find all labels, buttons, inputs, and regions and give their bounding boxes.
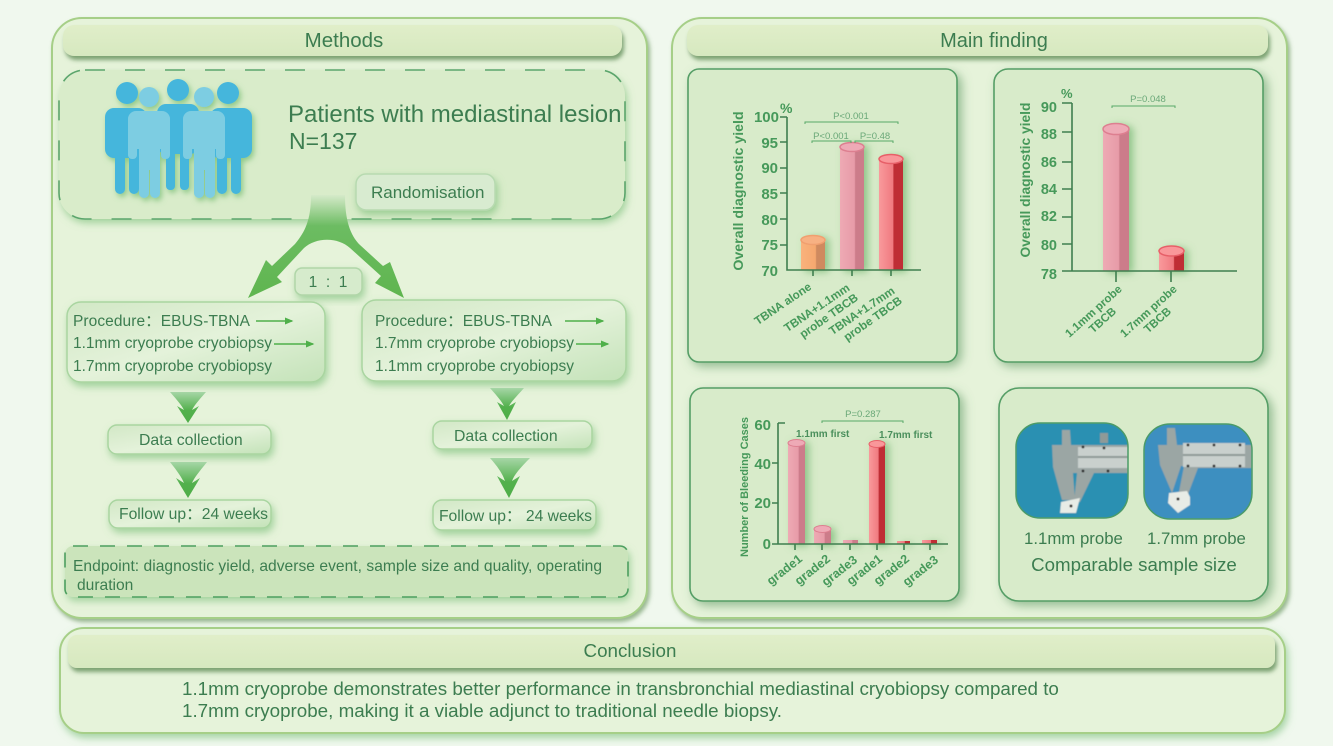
x labels: chart B: TBCB — [1087, 306, 1119, 336]
bars: chart C — [788, 440, 937, 544]
heading: main finding — [687, 25, 1268, 56]
y labels: chart B: 80 — [1041, 238, 1057, 254]
caption: probes: 1.7mm probe — [1147, 529, 1246, 548]
p values: chart A: P<0.001 — [833, 111, 869, 122]
p value: chart C: P=0.287 — [845, 409, 881, 420]
x labels: chart A: probe TBCB — [841, 294, 905, 344]
box: right data collection — [433, 421, 592, 449]
panel: chart B probe comparison — [994, 69, 1263, 362]
box: left procedure: 1.1mm cryoprobe cryobiopsy — [73, 335, 272, 352]
bars: chart B — [1103, 124, 1184, 271]
y labels: chart A: 100 — [754, 109, 779, 126]
box: left procedure: Procedure：EBUS-TBNA — [73, 313, 251, 330]
x labels: chart B: 1.1mm probe — [1063, 283, 1125, 340]
panel: chart C bleeding — [690, 388, 959, 601]
x labels: chart A: TBNA+1.1mm — [782, 281, 852, 335]
y labels: chart B: 90 — [1041, 100, 1057, 116]
text: conclusion: 1.1mm cryoprobe demonstrates better performance in transbronchial mediastinal cryobiopsy compared to — [182, 678, 1059, 699]
x labels: chart C: grade2 — [792, 552, 833, 588]
box: right procedure: Procedure：EBUS-TBNA — [375, 313, 553, 330]
box: endpoint: duration — [77, 577, 133, 594]
photo: 1.1mm probe caliper — [1016, 423, 1128, 518]
y labels: chart C: 0 — [763, 536, 771, 553]
y labels: chart A: 90 — [761, 160, 778, 177]
y labels: chart B: 82 — [1041, 209, 1057, 225]
box: left procedure — [67, 302, 325, 382]
box: ratio — [295, 268, 362, 295]
arrow: left to data collection — [170, 392, 206, 423]
y labels: chart A: 70 — [761, 263, 778, 280]
axes: chart B — [1062, 103, 1237, 282]
unit: chart B: % — [1061, 86, 1073, 101]
box: randomisation: Randomisation — [371, 183, 484, 202]
p value: chart B — [1112, 94, 1175, 108]
box: endpoint: Endpoint: diagnostic yield, adverse event, sample size and quality, operating — [73, 558, 602, 575]
p value: chart B: P=0.048 — [1130, 94, 1166, 105]
caption: comparable sample size: Comparable sample size — [1031, 554, 1237, 575]
y title: chart B: Overall diagnostic yield — [1018, 103, 1033, 257]
arrow: right to data collection — [490, 388, 524, 420]
box: left data collection: Data collection — [139, 432, 243, 449]
text: conclusion: 1.7mm cryoprobe, making it a viable adjunct to traditional needle biopsy. — [182, 700, 782, 721]
panel: conclusion — [60, 628, 1285, 733]
box: right data collection: Data collection — [454, 428, 558, 445]
box: left procedure: 1.7mm cryoprobe cryobiopsy — [73, 358, 272, 375]
box: right procedure: 1.7mm cryoprobe cryobiopsy — [375, 335, 574, 352]
arrow: right sequence 2 — [576, 343, 608, 345]
y labels: chart C: 20 — [754, 495, 771, 512]
box: left follow up — [109, 500, 271, 528]
y labels: chart A: 80 — [761, 212, 778, 229]
group labels: chart C: 1.7mm first — [879, 430, 933, 441]
y labels: chart A — [754, 109, 779, 280]
panel: main finding — [672, 18, 1287, 618]
p value: chart C — [822, 409, 903, 423]
x labels: chart A — [752, 280, 905, 344]
heading: methods: Methods — [305, 29, 383, 52]
y title: chart C: Number of Bleeding Cases — [739, 417, 751, 557]
text: patients — [288, 101, 622, 154]
box: right follow up: Follow up： 24 weeks — [439, 508, 592, 525]
heading: main finding: Main finding — [940, 30, 1048, 52]
box: ratio: 1 : 1 — [309, 274, 347, 291]
photo: 1.7mm probe caliper — [1144, 424, 1252, 519]
panel: sample size photos — [999, 388, 1268, 601]
icon: group of patients — [105, 79, 252, 198]
panel: chart A overall yield three arms — [688, 69, 957, 362]
box: left data collection — [108, 425, 271, 454]
x labels: chart C: grade1 — [764, 552, 805, 588]
x labels: chart C: grade3 — [900, 553, 941, 589]
axes: chart C — [772, 423, 948, 550]
box: randomisation — [356, 174, 495, 210]
x labels: chart C: grade3 — [819, 553, 860, 589]
caption: probes: 1.1mm probe — [1024, 529, 1123, 548]
arrow: left sequence 1 — [256, 320, 292, 322]
y labels: chart B — [1041, 100, 1057, 283]
x labels: chart C: grade2 — [871, 552, 912, 588]
text: patients: N=137 — [289, 128, 357, 154]
x labels: chart C — [764, 552, 941, 589]
y labels: chart A: 85 — [761, 186, 778, 203]
y labels: chart C: 60 — [754, 417, 771, 434]
unit: chart A: % — [780, 100, 793, 116]
group labels: chart C — [796, 429, 933, 441]
box: right procedure: 1.1mm cryoprobe cryobiopsy — [375, 358, 574, 375]
group labels: chart C: 1.1mm first — [796, 429, 850, 440]
box: right procedure — [362, 300, 626, 381]
x labels: chart B — [1063, 283, 1180, 340]
box: right follow up — [433, 500, 596, 530]
panel: methods — [52, 18, 647, 618]
y labels: chart B: 84 — [1041, 182, 1057, 198]
y labels: chart B: 88 — [1041, 127, 1057, 143]
x labels: chart C: grade1 — [844, 552, 885, 588]
y labels: chart A: 95 — [761, 135, 778, 152]
y labels: chart C: 40 — [754, 456, 771, 473]
axes: chart A — [780, 117, 921, 276]
heading: conclusion — [68, 635, 1275, 668]
y labels: chart B: 86 — [1041, 155, 1057, 171]
caption: probes — [1024, 529, 1246, 548]
x labels: chart A: probe TBCB — [797, 291, 861, 341]
text: conclusion — [182, 678, 1059, 721]
text: patients: Patients with mediastinal lesion — [288, 101, 622, 128]
x labels: chart A: TBNA alone — [752, 280, 814, 328]
y labels: chart C — [754, 417, 771, 553]
panel: patients — [59, 70, 625, 219]
arrow: left sequence 2 — [274, 343, 313, 345]
arrow: right sequence 1 — [565, 320, 603, 322]
y labels: chart A: 75 — [761, 237, 778, 254]
y labels: chart B: 78 — [1041, 267, 1057, 283]
arrow: right to follow up — [490, 458, 530, 498]
heading: conclusion: Conclusion — [584, 640, 676, 661]
y title: chart A: Overall diagnostic yield — [731, 111, 747, 271]
x labels: chart B: 1.7mm probe — [1118, 283, 1180, 340]
p values: chart A: P=0.48 — [860, 131, 890, 142]
bars: chart A — [801, 142, 903, 270]
box: endpoint — [65, 546, 628, 597]
box: left follow up: Follow up：24 weeks — [119, 506, 268, 523]
x labels: chart B: TBCB — [1142, 306, 1174, 336]
p values: chart A: P<0.001 — [813, 131, 849, 142]
p values: chart A — [805, 111, 898, 143]
x labels: chart A: TBNA+1.7mm — [827, 284, 897, 338]
arrow: left to follow up — [170, 462, 207, 498]
arrow: split to two arms — [248, 195, 404, 298]
heading: methods — [63, 25, 622, 56]
